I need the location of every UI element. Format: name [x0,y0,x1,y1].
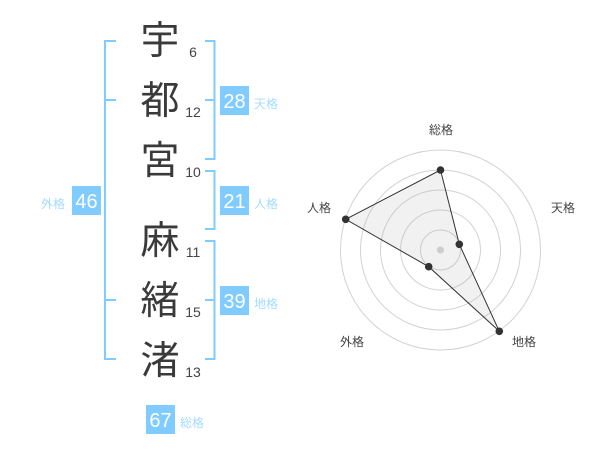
badge 外格 46 [72,186,101,215]
kanji 宮: 宮 [140,140,180,183]
badge 総格 67 [146,405,175,434]
radar axis labels: 総格 [429,122,453,137]
label 地格: 地格 [254,297,278,311]
kanji 宇: 宇 [140,20,180,63]
radar axis labels: 外格 [340,334,364,349]
bracket: 天格 [205,41,214,159]
badge 総格 67: 67 [149,410,172,432]
stroke count 15: 15 [185,304,201,320]
badge 地格 39 [220,286,249,315]
bracket: 人格 [205,171,214,229]
label 外格: 外格 [41,197,65,211]
radar axis labels: 人格 [307,200,331,215]
kanji 渚: 渚 [140,340,180,383]
radar axis labels: 天格 [551,200,575,215]
badge 人格 21: 21 [223,191,246,213]
badge 地格 39: 39 [223,291,246,313]
kanji column with stroke counts [140,20,201,383]
stroke count 12: 12 [185,104,201,120]
stroke count 10: 10 [185,164,201,180]
kanji 緒: 緒 [140,280,180,323]
radar polygon [346,170,499,331]
label 総格: 総格 [180,416,204,430]
stroke count 11: 11 [186,244,200,260]
bracket: outer frame 外格 [105,41,116,359]
kanji 都: 都 [140,80,180,123]
kanji 麻: 麻 [140,220,180,263]
radar axis labels: 地格 [512,334,536,349]
radar center dot [437,246,444,254]
badge 人格 21 [220,186,249,215]
badge 天格 28 [220,86,249,115]
label 天格: 天格 [254,97,278,111]
stroke count 13: 13 [185,364,201,380]
label 人格: 人格 [254,197,278,211]
badge 外格 46: 46 [75,191,98,213]
radar data points [342,166,503,335]
radar axis labels [307,122,575,349]
bracket: 地格 [205,241,214,359]
badge 天格 28: 28 [223,91,246,113]
stroke count 6: 6 [189,44,197,60]
